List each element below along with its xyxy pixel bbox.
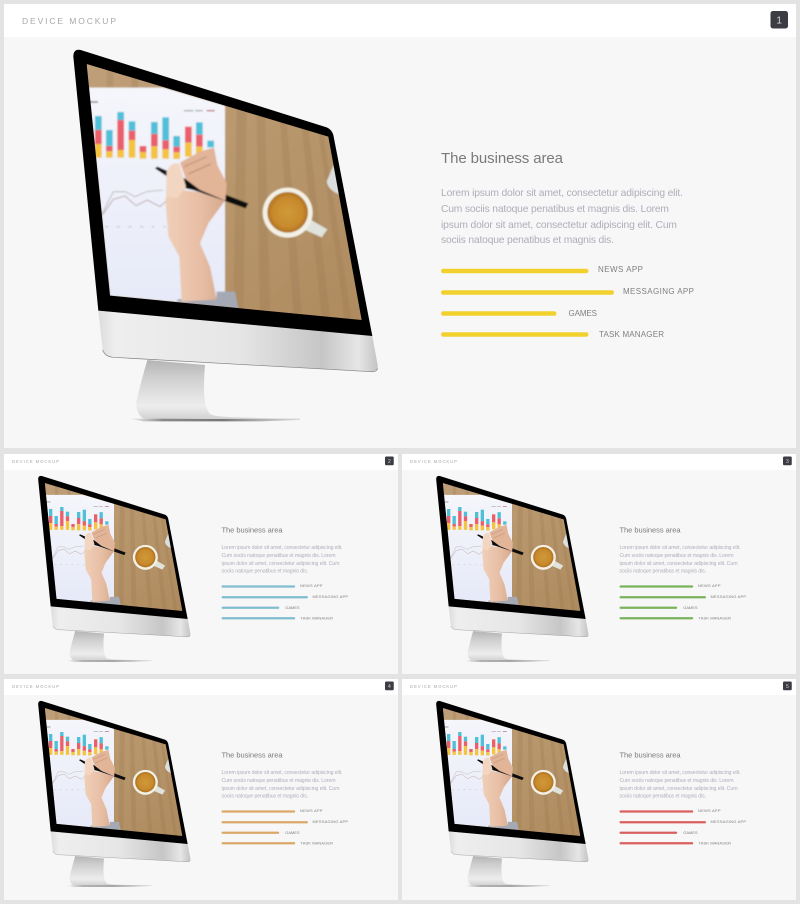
body text: sociis natoque penatibus et magnis dis. xyxy=(441,235,614,246)
bar list: TASK MANAGER xyxy=(300,616,333,620)
slide contents xyxy=(12,456,394,662)
body text: Cum sociis natoque penatibus et magnis dis. Lorem xyxy=(222,778,336,784)
stacked bar chart on paper xyxy=(90,101,215,159)
hand xyxy=(165,148,227,302)
slide contents xyxy=(410,682,792,887)
bar list: GAMES xyxy=(683,830,698,835)
header title: DEVICE MOCKUP xyxy=(410,684,457,689)
bar list: TASK MANAGER xyxy=(698,840,731,846)
wood grain xyxy=(107,68,352,320)
bar list: NEWS APP xyxy=(698,808,721,813)
header title: DEVICE MOCKUP xyxy=(410,459,457,464)
bar list xyxy=(620,808,746,846)
monitor illustration xyxy=(38,701,190,887)
monitor illustration xyxy=(73,50,378,421)
body text: ipsum dolor sit amet, consectetur adipiscing elit. Cum xyxy=(222,786,340,792)
panel background xyxy=(4,679,398,900)
page number badge xyxy=(385,682,394,690)
monitor bezel xyxy=(73,50,372,336)
bar list: GAMES xyxy=(568,309,597,318)
bar list xyxy=(222,808,348,846)
page number badge xyxy=(783,682,792,690)
body text: Cum sociis natoque penatibus et magnis dis. Lorem xyxy=(441,204,669,215)
body text: ipsum dolor sit amet, consectetur adipiscing elit. Cum xyxy=(620,786,738,792)
bar list xyxy=(620,583,746,620)
monitor illustration xyxy=(436,701,588,887)
bar list: MESSAGING APP xyxy=(710,819,746,824)
sleeve xyxy=(177,292,238,308)
page number badge: 1 xyxy=(776,16,782,26)
bar list: NEWS APP xyxy=(698,583,721,588)
page number badge: 4 xyxy=(388,684,391,690)
monitor illustration xyxy=(38,476,190,662)
page number badge: 2 xyxy=(388,459,391,465)
bar list: GAMES xyxy=(285,605,300,610)
bar list: TASK MANAGER xyxy=(300,840,333,846)
panel background xyxy=(4,4,796,448)
panel: slide 3 green xyxy=(402,454,796,674)
header bar xyxy=(402,679,796,695)
pen xyxy=(155,167,248,208)
page number badge xyxy=(783,456,792,465)
bar list xyxy=(441,265,694,339)
body text xyxy=(222,545,342,574)
header title: DEVICE MOCKUP xyxy=(12,459,59,464)
heading: The business area xyxy=(620,750,681,760)
body text xyxy=(620,545,740,574)
body text xyxy=(441,188,683,246)
heading: The business area xyxy=(222,526,283,534)
bar list: GAMES xyxy=(285,830,300,835)
bar list: TASK MANAGER xyxy=(698,616,731,620)
monitor chin xyxy=(98,311,378,372)
bar list: GAMES xyxy=(683,605,698,610)
body text xyxy=(620,770,740,800)
panel: slide 4 orange xyxy=(4,679,398,900)
slide contents xyxy=(410,456,792,662)
header bar xyxy=(4,4,796,37)
wood desk xyxy=(83,60,367,323)
heading: The business area xyxy=(222,750,283,760)
slide contents xyxy=(12,682,394,887)
page number badge: 3 xyxy=(786,459,789,465)
page number badge: 5 xyxy=(786,684,789,690)
body text: ipsum dolor sit amet, consectetur adipiscing elit. Cum xyxy=(620,561,738,567)
monitor illustration xyxy=(436,476,588,662)
body text xyxy=(222,770,342,800)
body text: Lorem ipsum dolor sit amet, consectetur adipiscing elit. xyxy=(620,770,740,776)
bar list: NEWS APP xyxy=(598,265,643,274)
bar list: NEWS APP xyxy=(300,583,323,588)
body text: Cum sociis natoque penatibus et magnis dis. Lorem xyxy=(620,553,734,559)
header bar xyxy=(402,454,796,470)
body text: Cum sociis natoque penatibus et magnis dis. Lorem xyxy=(620,778,734,784)
page number badge xyxy=(385,456,394,465)
bar list: MESSAGING APP xyxy=(312,819,348,824)
header bar xyxy=(4,679,398,695)
bar list xyxy=(222,583,348,620)
body text: Lorem ipsum dolor sit amet, consectetur adipiscing elit. xyxy=(222,770,342,776)
body text: sociis natoque penatibus et magnis dis. xyxy=(222,568,308,574)
bar list: NEWS APP xyxy=(300,808,323,813)
paper sheet xyxy=(89,88,225,307)
body text: Cum sociis natoque penatibus et magnis dis. Lorem xyxy=(222,553,336,559)
bar list: MESSAGING APP xyxy=(710,594,746,599)
panel background xyxy=(402,454,796,674)
bar list: MESSAGING APP xyxy=(623,287,694,296)
panel: slide 1 yellow xyxy=(4,4,796,448)
heading: The business area xyxy=(620,526,681,534)
panel background xyxy=(4,454,398,674)
body text: ipsum dolor sit amet, consectetur adipiscing elit. Cum xyxy=(222,561,340,567)
bar list: MESSAGING APP xyxy=(312,594,348,599)
body text: sociis natoque penatibus et magnis dis. xyxy=(222,794,308,800)
body text: Lorem ipsum dolor sit amet, consectetur adipiscing elit. xyxy=(441,188,683,199)
heading: The business area xyxy=(441,150,564,167)
body text: sociis natoque penatibus et magnis dis. xyxy=(620,794,706,800)
panel: slide 2 blue xyxy=(4,454,398,674)
panel: slide 5 red xyxy=(402,679,796,900)
monitor stand xyxy=(128,360,300,421)
body text: Lorem ipsum dolor sit amet, consectetur adipiscing elit. xyxy=(222,545,342,551)
body text: sociis natoque penatibus et magnis dis. xyxy=(620,568,706,574)
line chart on paper xyxy=(102,190,167,227)
header title: DEVICE MOCKUP xyxy=(12,684,59,689)
header title: DEVICE MOCKUP xyxy=(22,16,116,26)
panel background xyxy=(402,679,796,900)
page number badge xyxy=(770,11,788,28)
body text: Lorem ipsum dolor sit amet, consectetur adipiscing elit. xyxy=(620,545,740,551)
bar list: TASK MANAGER xyxy=(599,330,664,339)
mouse xyxy=(327,164,343,194)
body text: ipsum dolor sit amet, consectetur adipiscing elit. Cum xyxy=(441,220,677,231)
header bar xyxy=(4,454,398,470)
coffee cup xyxy=(263,188,327,238)
screen photo xyxy=(83,60,367,323)
